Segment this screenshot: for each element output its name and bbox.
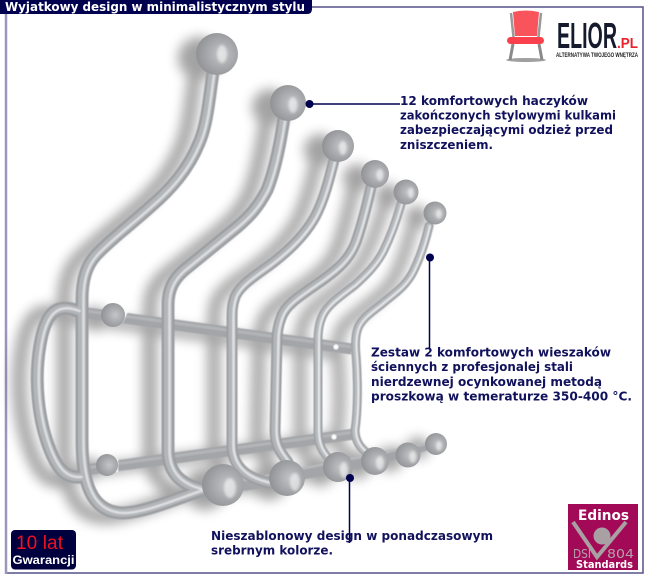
text block: colour description	[211, 529, 493, 558]
badge: 10 year guarantee	[11, 530, 76, 570]
text block: hooks description	[400, 94, 616, 152]
image: wall coat rack with ball-tipped hooks	[19, 33, 447, 517]
text block: colour description: srebrnym kolorze.	[211, 544, 333, 558]
text block: hooks description: zakończonych stylowymi kulkami	[400, 108, 616, 122]
rails	[72, 309, 436, 491]
text block: material description: Zestaw 2 komfortowych wieszaków	[371, 346, 611, 360]
badge: Edinos DSI 804 Standards	[568, 504, 638, 571]
badge: Edinos DSI 804 Standards: DSI	[573, 547, 591, 561]
badge: Edinos DSI 804 Standards: 804	[607, 547, 634, 561]
hooks	[37, 72, 430, 513]
text block: material description	[371, 346, 632, 404]
text block: material description: nierdzewnej ocynkowanej metodą	[371, 375, 602, 389]
icon: V and circle mark	[573, 522, 626, 557]
soft drop shadow of the rack	[19, 37, 429, 517]
text block: hooks description: 12 komfortowych haczyków	[400, 94, 588, 108]
badge: Edinos DSI 804 Standards: Edinos	[578, 508, 629, 524]
icon: red chair	[506, 10, 546, 62]
logo: Elior.pl: .PL	[617, 35, 638, 52]
title bar: Wyjatkowy design w minimalistycznym stylu	[5, 0, 305, 14]
text block: material description: ściennych z profesjonalej stali	[371, 360, 573, 374]
badge: 10 year guarantee: 10 lat	[16, 533, 64, 554]
callout: hooks	[306, 94, 616, 152]
callout: colour	[211, 474, 493, 558]
logo: Elior.pl	[506, 10, 638, 62]
text block: hooks description: zabezpieczającymi odzież przed	[400, 123, 613, 137]
callout: material	[371, 254, 632, 404]
text block: colour description: Nieszablonowy design w ponadczasowym	[211, 529, 493, 543]
badge: 10 year guarantee: Gwarancji	[12, 555, 74, 567]
balls	[96, 33, 447, 506]
text block: material description: proszkową w temeraturze 350-400 °C.	[371, 390, 632, 404]
text block: hooks description: zniszczeniem.	[400, 138, 493, 152]
badge: Edinos DSI 804 Standards: Standards	[576, 559, 633, 571]
